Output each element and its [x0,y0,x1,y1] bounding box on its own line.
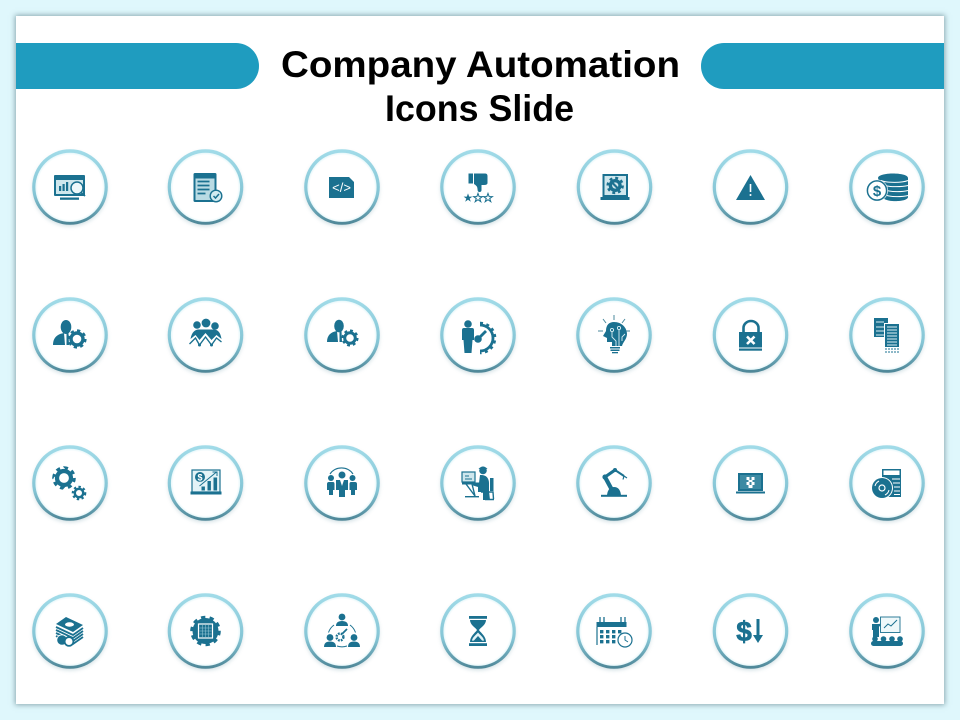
icon: padlock with cross [713,297,788,374]
icon: presenter with audience [849,593,925,670]
glyph: dollar down arrow: $ [736,616,752,647]
icon: stacked documents [849,297,925,374]
icon: person with half gear [440,297,516,374]
icon: robotic arm [576,445,652,522]
icon: hourglass [440,593,516,670]
glyph: stacked documents [874,318,900,352]
icon: monitor with magnifier [32,149,108,226]
icon: team with zigzag trend [168,297,243,374]
icon: calendar with clock [576,593,652,670]
glyph: code file: </> [332,180,351,195]
glyph: laptop with growth chart: $ [197,472,203,482]
glyph: robotic arm [601,468,627,497]
glyph: laptop with pattern [736,473,765,494]
icon: laptop with gear and wrench [577,149,652,226]
glyph: person with half gear [462,320,495,353]
glyph: padlock with cross [739,321,762,351]
icon: laptop with financial growth chart [168,445,243,522]
icon: code file [304,149,380,226]
icon: disc and document [849,445,925,522]
icon: two gears [32,445,108,522]
glyph: businessman with gear [53,320,85,347]
glyph: two gears [54,468,85,499]
title: Icons Slide [385,88,574,129]
glyph: money stack [56,617,83,646]
glyph: hourglass [469,616,487,646]
glyph: warning triangle [736,175,765,200]
glyph: laptop with gear [600,174,630,200]
glyph: three business people [327,468,357,497]
glyph: thumbs down with stars [464,174,492,202]
icon: money stack with coins [32,593,108,670]
icon: dollar with down arrow [713,593,788,670]
glyph: coin stack: $ [873,183,882,200]
icon: leadership team [304,445,380,522]
icon: dollar coin with coin stack [849,149,925,226]
glyph: monitor with magnifier [54,175,85,200]
glyph: manager with gear [327,320,357,345]
glyph: microchip gear [192,618,219,644]
glyph: document with check [194,173,222,202]
glyph: calendar with clock [596,617,632,647]
icon: team cycle with tools [304,593,380,670]
icon: engineer at computer desk [440,445,516,522]
glyph: lightbulb head [598,315,630,353]
icon: manager with gear [304,297,380,374]
icon: lightbulb head with circuit [576,297,652,374]
glyph: team with zigzag [190,319,222,346]
icon: microchip gear [168,593,243,670]
glyph: engineer at desk [462,466,494,500]
icon: warning triangle [713,149,788,226]
title [281,44,680,129]
title: Company Automation [281,44,680,85]
right header bar [701,43,944,89]
icon: businessman with gear [32,297,108,374]
glyph: disc and document [871,469,901,499]
left header bar [16,43,259,89]
icon: document with check [168,149,243,226]
icon: thumbs down with star rating [440,149,516,226]
glyph: presenter with audience [871,617,903,646]
icon: laptop with pattern [713,445,788,522]
glyph: team cycle with tools [324,614,360,647]
